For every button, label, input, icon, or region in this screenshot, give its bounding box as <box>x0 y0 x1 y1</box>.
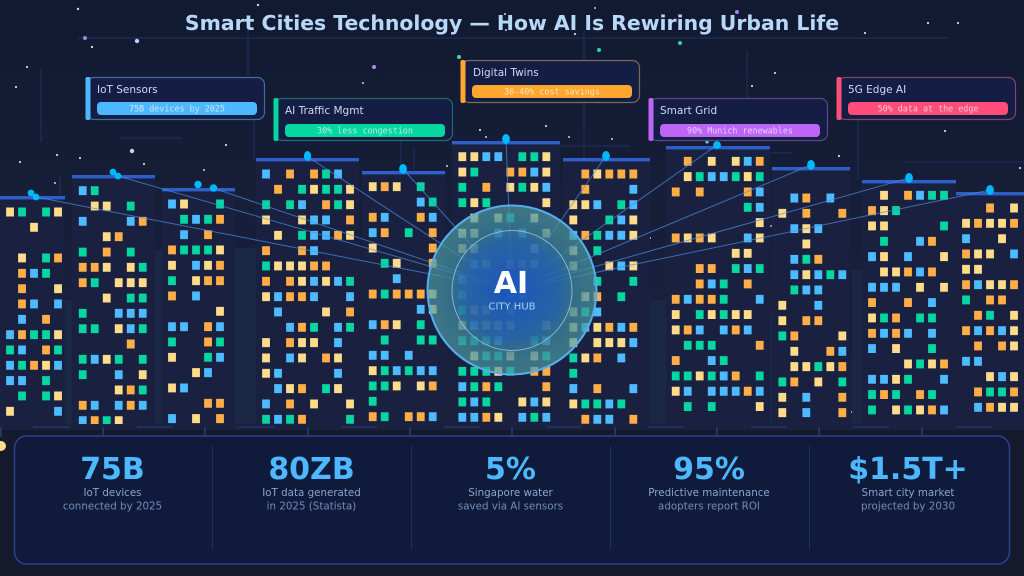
stat: 80ZB <box>262 452 361 512</box>
stat: 95%: 95% <box>673 452 745 487</box>
stat: $1.5T+ <box>848 452 968 512</box>
callout: AI Traffic Mgmt: AI Traffic Mgmt <box>285 105 364 117</box>
AI city hub <box>428 206 596 374</box>
callout: AI Traffic Mgmt <box>274 98 452 141</box>
stat: 95% <box>648 452 770 512</box>
callout: IoT Sensors: IoT Sensors <box>97 84 158 96</box>
callout: Smart Grid <box>648 98 828 141</box>
connector lines to hub <box>36 139 990 290</box>
building 4 <box>256 158 359 430</box>
callout: AI Traffic Mgmt: 30% less congestion <box>317 126 413 136</box>
callout: Digital Twins <box>460 60 640 103</box>
stat: 75B: IoT devices <box>83 487 142 499</box>
stat: 80ZB: 80ZB <box>268 452 355 487</box>
stat: 80ZB: in 2025 (Statista) <box>267 500 356 512</box>
stat: $1.5T+: Smart city market <box>862 487 954 499</box>
building 5 <box>362 171 445 430</box>
street ground line and ticks <box>1 427 992 437</box>
callout: IoT Sensors: 75B devices by 2025 <box>129 104 225 114</box>
callout: Smart Grid: Smart Grid <box>660 105 717 117</box>
stat: 95%: adopters report ROI <box>658 500 760 512</box>
stat: 75B: connected by 2025 <box>63 500 162 512</box>
stat: 95%: Predictive maintenance <box>648 487 770 499</box>
title: Smart Cities Technology — How AI Is Rewiring Urban Life <box>185 11 839 35</box>
callout: Smart Grid: 90% Munich renewables <box>687 126 793 136</box>
callout: Digital Twins: Digital Twins <box>473 67 539 79</box>
stat: 80ZB: IoT data generated <box>262 487 361 499</box>
building 3 <box>162 188 235 430</box>
circuit traces <box>41 30 1024 195</box>
hub subtitle: CITY HUB <box>488 302 536 312</box>
yellow marker <box>0 441 6 451</box>
stat: 5%: saved via AI sensors <box>458 500 563 512</box>
stats panel <box>14 436 1010 564</box>
building 1 <box>0 196 65 430</box>
stars <box>15 4 1021 413</box>
stat: $1.5T+: $1.5T+ <box>848 452 968 487</box>
callout: 5G Edge AI: 5G Edge AI <box>848 84 906 96</box>
background towers <box>64 248 864 428</box>
callout: Digital Twins: 30-40% cost savings <box>504 86 600 96</box>
callout: IoT Sensors <box>86 77 264 120</box>
stat: 75B <box>63 452 162 512</box>
building 8 <box>666 146 770 430</box>
callout: 5G Edge AI <box>836 77 1016 120</box>
building 11 <box>956 192 1024 430</box>
stat: 75B: 75B <box>80 452 145 487</box>
callout: 5G Edge AI: 50% data at the edge <box>878 104 978 114</box>
building 7 <box>563 158 650 430</box>
hub title: AI <box>494 266 528 301</box>
building 2 <box>72 175 155 430</box>
stat: $1.5T+: projected by 2030 <box>861 500 955 512</box>
stat: 5% <box>458 452 563 512</box>
stat: 5%: 5% <box>485 452 536 487</box>
stat: 5%: Singapore water <box>468 487 554 499</box>
IoT nodes <box>28 134 994 200</box>
building 9 <box>772 167 850 430</box>
building 6 <box>452 141 560 430</box>
building 10 <box>862 180 956 430</box>
